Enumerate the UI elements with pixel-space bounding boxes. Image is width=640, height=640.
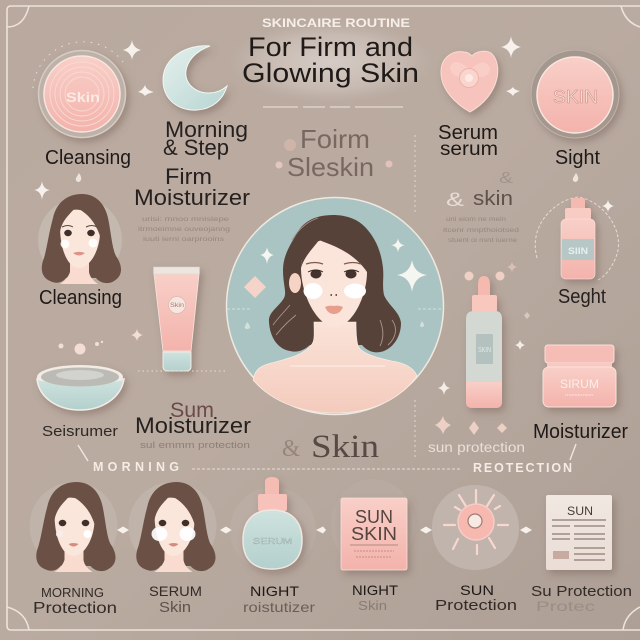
hair back — [269, 215, 401, 352]
step 4: sun skin box — [331, 479, 415, 571]
heading: small & skin: & — [499, 170, 513, 187]
label: sun protection step — [435, 582, 517, 614]
icon: serum bottle upper right — [535, 197, 618, 280]
icon: face portrait left — [38, 194, 122, 284]
icon: cream tube — [154, 267, 200, 371]
label: serum — [438, 122, 498, 160]
label: moisturizer right: Moisturizer — [533, 421, 628, 443]
icon: sparkles top left — [34, 40, 154, 200]
brows and eyes — [306, 262, 361, 278]
portrait backdrop circle — [226, 198, 444, 414]
vertical dotted guide — [414, 135, 416, 460]
heading: small & skin: skin — [473, 188, 513, 210]
icon: cleansing pad — [38, 50, 126, 138]
label: sun protection faded: Protec — [536, 598, 595, 614]
faded center heading: Sleskin — [287, 152, 374, 182]
eyebrow heading: SKINCAIRE ROUTINE — [262, 16, 410, 30]
section divider dotted — [192, 468, 462, 470]
step 2: serum face — [128, 482, 216, 572]
label: seisrumer: Seisrumer — [42, 423, 118, 440]
small caption left: urisi: mnoo mnislepe — [142, 216, 230, 223]
icon: skin compact: SKIN — [553, 87, 598, 107]
label: night skin: NIGHT — [352, 582, 398, 598]
icon: cream tube: Skin — [170, 303, 184, 309]
text block: sum moisturizer: Sum — [170, 399, 214, 422]
fringe — [300, 224, 374, 272]
label: night skin: Skin — [358, 598, 387, 613]
icon: dropper bottle center right — [464, 262, 517, 408]
heading: & skin lower center: & — [282, 436, 300, 462]
bottom labels — [33, 582, 632, 617]
main title: For Firm and — [248, 32, 413, 62]
icon: serum jar: moisturizer — [565, 392, 595, 397]
icon: cleansing pad: Skin — [66, 89, 100, 105]
text block: morning step — [134, 117, 250, 210]
step 3: serum bottle — [230, 477, 316, 573]
faded center heading — [276, 124, 392, 182]
small caption left: iuuti ierni oarprooins — [143, 236, 225, 243]
label: serum: Serum — [438, 122, 498, 144]
icon: heart serum — [441, 51, 498, 112]
label: night moisturizer: roistutizer — [243, 599, 315, 615]
small caption left — [138, 216, 231, 243]
shoulder highlight — [290, 365, 385, 367]
hair highlights — [273, 218, 395, 346]
text block: sum moisturizer: sul emmm protection — [140, 440, 250, 450]
title glow — [225, 20, 435, 104]
label: sight: Sight — [555, 147, 600, 169]
label: serum skin: SERUM — [149, 583, 202, 599]
heading: & skin lower center — [282, 429, 379, 465]
neck and shoulders — [253, 322, 417, 413]
icon: serum bottle upper right: SIIN — [568, 246, 588, 256]
faded center heading: Foirm — [300, 124, 370, 154]
pad sparkle dots — [33, 42, 123, 88]
small caption right: stuent oi nsnt iuerne — [448, 237, 517, 244]
heading: small & skin — [446, 170, 513, 211]
label: serum skin — [149, 583, 202, 616]
text block: morning step: & Step — [163, 135, 229, 160]
label: cleansing: Cleansing — [45, 147, 131, 169]
nose — [330, 294, 337, 296]
section heading: morning: MORNING — [93, 460, 179, 474]
icon: serum jar: SIRUM — [560, 377, 599, 391]
step 6: document: SUN — [567, 504, 593, 518]
text block: morning step: Morning — [165, 117, 248, 142]
label: night skin — [352, 582, 398, 613]
label: night moisturizer — [243, 583, 315, 615]
face — [301, 238, 367, 327]
label: morning protection — [33, 585, 117, 617]
step 4: sun skin box: SUN — [355, 507, 393, 527]
text block: sum moisturizer: Moisturizer — [135, 413, 251, 438]
label: morning protection: MORNING — [41, 585, 104, 600]
portrait sparkles — [227, 238, 442, 329]
label: serum: serum — [440, 139, 498, 160]
small caption right — [443, 216, 520, 244]
text block: sum moisturizer — [135, 399, 251, 450]
icon: bowl with sparkles — [37, 329, 143, 410]
icon: crescent moon — [163, 46, 227, 110]
step 1: morning face — [30, 482, 118, 572]
step 6: document — [546, 495, 612, 570]
heading: small & skin: & — [446, 190, 464, 211]
label: serum skin: Skin — [159, 599, 191, 616]
label: sun protection step: Protection — [435, 597, 517, 614]
icon: serum jar — [543, 345, 616, 407]
text block: morning step: Firm — [165, 164, 212, 189]
left ear — [289, 273, 301, 293]
label: sun protection: sun protection — [428, 439, 525, 455]
lips — [325, 306, 343, 314]
heading: & skin lower center: Skin — [311, 429, 379, 465]
sparkle streak right — [570, 444, 576, 460]
sparkles near dropper — [435, 312, 530, 435]
step 5: sun icon — [432, 485, 519, 570]
title block — [225, 16, 435, 107]
icon: sparkles top right — [501, 36, 578, 182]
step 4: sun skin box: SKIN — [351, 524, 397, 544]
icon: skin compact — [531, 50, 619, 138]
small caption right: uni eiom ne mein — [446, 216, 506, 223]
sparkle streak — [78, 445, 88, 461]
section heading: protection: REOTECTION — [473, 461, 572, 475]
dotted line beneath tube — [138, 370, 225, 372]
label: sun protection faded: Su Protection — [531, 583, 632, 600]
step arrows: diamonds — [117, 526, 532, 534]
title divider — [263, 106, 403, 108]
label: seght: Seght — [558, 286, 606, 308]
main portrait — [226, 198, 444, 414]
text block: morning step: Moisturizer — [134, 185, 250, 210]
label: sun protection faded — [531, 583, 632, 614]
label: cleansing 2: Cleansing — [39, 287, 122, 309]
cheek patches — [304, 283, 322, 299]
title block: Glowing Skin — [242, 58, 419, 88]
step 3: serum bottle: SERUM — [253, 536, 292, 546]
label: sun protection step: SUN — [460, 582, 494, 598]
small caption right: itcenr mnpthoiotsed — [443, 227, 520, 234]
label: morning protection: Protection — [33, 600, 117, 617]
icon: dropper bottle center right: SKIN — [478, 347, 491, 354]
label: night moisturizer: NIGHT — [250, 583, 299, 599]
small caption left: itrmoeimne ouveojanng — [138, 226, 231, 233]
